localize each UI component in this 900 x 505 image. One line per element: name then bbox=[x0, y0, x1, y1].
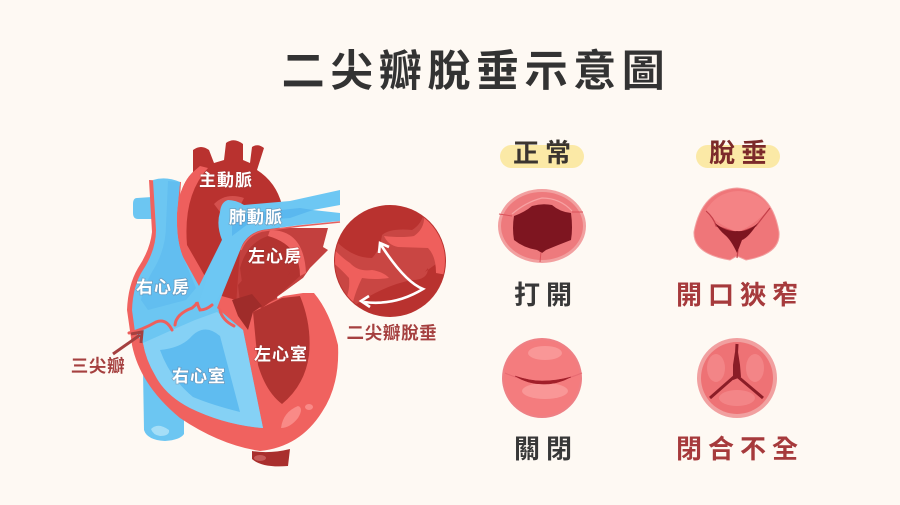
tricuspid arrow bbox=[113, 332, 142, 354]
valve: prolapse open bbox=[694, 188, 779, 260]
label: left atrium: 左心房 bbox=[248, 247, 302, 266]
label: tricuspid valve: 三尖瓣 bbox=[71, 356, 125, 376]
inferior vena cava bbox=[143, 370, 184, 441]
left ventricle chamber bbox=[253, 296, 310, 404]
zoomed mitral valve circle bbox=[334, 205, 446, 317]
heart illustration bbox=[127, 140, 340, 466]
superior vena cava stub bbox=[133, 197, 152, 219]
apex vessel bbox=[252, 449, 290, 466]
left atrium lower fill bbox=[238, 262, 290, 308]
label: left ventricle: 左心室 bbox=[254, 344, 308, 364]
pulmonary artery lower edge bbox=[241, 222, 340, 250]
label: right atrium: 右心房 bbox=[136, 278, 190, 297]
label: right ventricle: 右心室 bbox=[172, 366, 226, 386]
heading: prolapse: 脫垂 bbox=[709, 138, 773, 168]
left ventricle dark wedge bbox=[232, 294, 262, 330]
label: closed: 關閉 bbox=[514, 434, 578, 464]
valve: normal closed bbox=[502, 338, 582, 418]
left atrium bbox=[236, 228, 328, 312]
valve: normal open bbox=[498, 189, 586, 263]
valve: incomplete closure bbox=[697, 338, 777, 418]
label: mitral valve prolapse: 二尖瓣脫垂 bbox=[346, 323, 438, 343]
right ventricle light area bbox=[143, 312, 263, 428]
pulmonary artery bbox=[198, 190, 340, 315]
heart outer wall bbox=[127, 180, 338, 451]
label: open: 打開 bbox=[514, 280, 578, 310]
apex highlight bbox=[281, 406, 301, 428]
label: pulmonary artery: 肺動脈 bbox=[229, 208, 283, 227]
label: aorta: 主動脈 bbox=[199, 171, 253, 190]
aorta and branches bbox=[176, 140, 282, 300]
zoom wedge bbox=[277, 262, 345, 297]
heading: normal: 正常 bbox=[513, 138, 577, 168]
title: 二尖瓣脫垂示意圖 bbox=[282, 48, 670, 96]
right ventricle inner area bbox=[160, 329, 240, 412]
right heart blue bbox=[132, 178, 263, 428]
label: narrowed opening: 開口狹窄 bbox=[676, 280, 804, 310]
tricuspid valve bbox=[129, 302, 234, 333]
label: incomplete closure text: 閉合不全 bbox=[676, 434, 804, 464]
white arrow bbox=[364, 245, 423, 303]
